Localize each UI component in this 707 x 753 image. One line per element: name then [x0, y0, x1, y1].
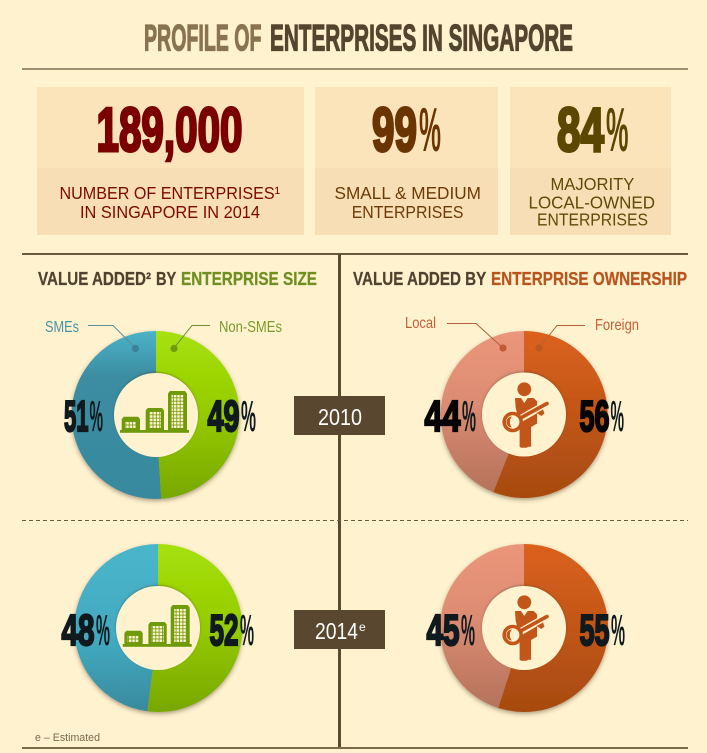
footnote: estimated: e – Estimated — [35, 732, 100, 744]
title: PROFILE OF — [144, 18, 262, 58]
icon: buildings — [123, 605, 192, 647]
heading: value added by enterprise size: BY — [156, 269, 176, 289]
value: SMEs 51%: 51 — [64, 392, 88, 441]
stat: 189,000: 189,000 — [96, 96, 242, 165]
panel: majority local-owned enterprises — [510, 87, 671, 235]
year label: 2010: 2010 — [318, 404, 362, 430]
caption: number of enterprises: IN SINGAPORE IN 2014 — [80, 202, 260, 222]
stat: 84%: 84 — [557, 96, 604, 165]
label: Foreign — [535, 317, 639, 352]
donut chart: enterprise size 2014: % — [96, 606, 110, 655]
icon: buildings — [120, 391, 189, 433]
year label: 2010 — [294, 396, 385, 435]
value: Local 45%: 45 — [426, 606, 460, 655]
icon: person with key — [504, 382, 547, 448]
icon: person with key — [504, 595, 547, 661]
label: Foreign: Foreign — [595, 317, 639, 334]
label: Local — [405, 315, 507, 352]
label: SMEs — [45, 319, 139, 352]
donut chart: enterprise ownership 2010: % — [462, 392, 476, 441]
panel: majority local-owned enterprises: % — [606, 96, 628, 165]
year label: 2014 estimated: e — [359, 620, 366, 634]
donut chart: enterprise ownership 2010: % — [610, 392, 624, 441]
caption: majority local-owned enterprises: LOCAL-OWNED — [528, 192, 655, 212]
value: SMEs 48%: 48 — [62, 606, 94, 655]
year label: 2014 estimated — [294, 610, 385, 649]
donut chart: enterprise size 2010: % — [241, 392, 256, 441]
value: Foreign 55%: 55 — [580, 606, 610, 655]
donut chart: enterprise ownership 2010 — [405, 315, 639, 498]
heading: value added by enterprise size: ENTERPRISE SIZE — [181, 269, 317, 289]
donut chart: enterprise ownership 2014 — [426, 544, 625, 712]
caption: small and medium enterprises: SMALL & MEDIUM — [334, 183, 481, 203]
value: Non-SMEs 49%: 49 — [208, 392, 240, 441]
value: Foreign 56%: 56 — [580, 392, 610, 441]
label: SMEs: SMEs — [45, 319, 79, 336]
heading: value added by enterprise size: VALUE ADDED² — [38, 269, 151, 289]
caption: majority local-owned enterprises: MAJORITY — [550, 174, 635, 194]
donut chart: enterprise size 2010 — [45, 319, 282, 499]
caption: majority local-owned enterprises: ENTERPRISES — [537, 210, 648, 230]
value: Local 44%: 44 — [424, 392, 461, 441]
stat: 99%: 99 — [372, 96, 417, 165]
label: Local: Local — [405, 315, 436, 332]
value: Non-SMEs 52%: 52 — [210, 606, 238, 655]
label: Non-SMEs — [170, 319, 282, 352]
caption: number of enterprises: NUMBER OF ENTERPRISES¹ — [60, 183, 280, 203]
panel: small and medium enterprises — [315, 87, 498, 235]
heading: value added by enterprise ownership: VALUE ADDED BY — [353, 269, 486, 289]
infographic canvas: % — [611, 606, 625, 655]
donut chart: enterprise size 2014 — [62, 544, 254, 712]
caption: small and medium enterprises: ENTERPRISES — [352, 202, 464, 222]
donut chart: enterprise size 2010: % — [90, 392, 103, 441]
panel: small and medium enterprises: % — [419, 96, 441, 165]
year label: 2014 estimated: 2014 — [315, 618, 358, 644]
label: Non-SMEs: Non-SMEs — [219, 319, 282, 336]
donut chart: enterprise ownership 2014: % — [461, 606, 475, 655]
panel: number of enterprises — [37, 87, 304, 235]
infographic canvas: % — [240, 606, 254, 655]
